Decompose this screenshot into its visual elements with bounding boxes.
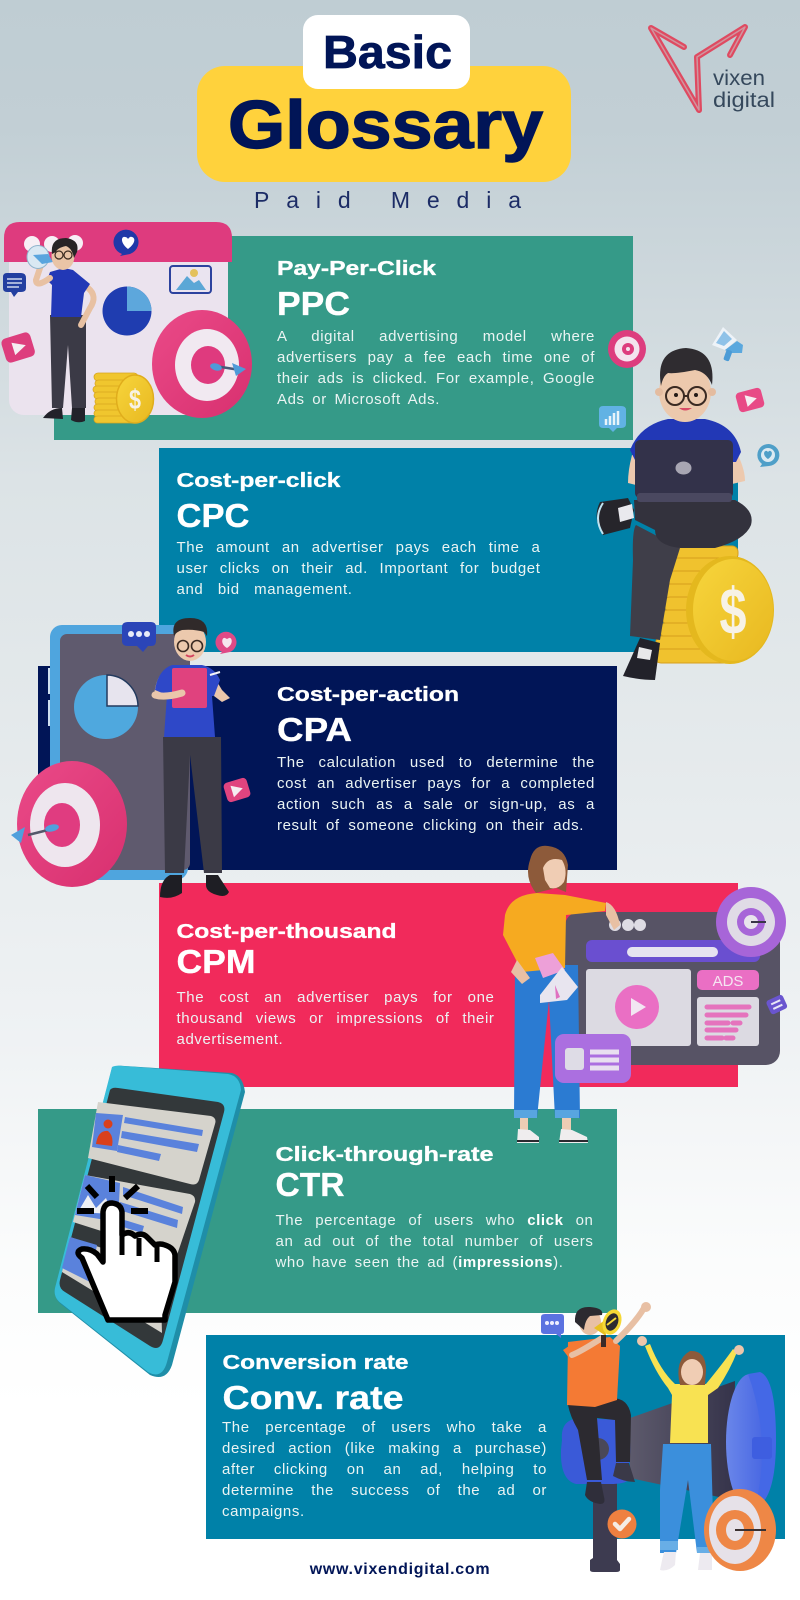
chart: pie — [102, 286, 152, 336]
icon: megaphone — [712, 327, 743, 362]
icon: coin stack — [93, 373, 154, 423]
panel: CPM — [159, 883, 738, 1087]
coin stack — [654, 546, 738, 663]
text: Conversion rate definition — [222, 1419, 547, 1520]
logo wordmark: vixen — [713, 67, 765, 90]
footer website: www.vixendigital.com — [310, 1561, 490, 1578]
text: Conversion rate definition: determine the success of the ad or — [222, 1482, 547, 1499]
illustration: CPM ad screen with woman — [503, 846, 788, 1143]
white title plate — [303, 15, 470, 89]
text: CPA definition — [277, 754, 595, 834]
icon: check badge — [608, 1510, 636, 1538]
text: CPM definition — [176, 989, 494, 1048]
man in orange shirt — [563, 1302, 651, 1504]
text: CPA definition: The calculation used to determine the — [277, 754, 595, 771]
panel: CPC: Cost-per-click — [176, 469, 341, 492]
icon: dots bubble — [122, 622, 156, 652]
icon: orange target — [704, 1489, 776, 1571]
text: CPM definition: The cost an advertiser pays for one — [176, 989, 494, 1006]
icon: target with dart — [11, 761, 127, 887]
man with clipboard — [154, 618, 230, 898]
chart: pie — [74, 675, 138, 739]
text: CPC definition — [176, 539, 540, 598]
panel: PPC: Pay-Per-Click — [277, 257, 437, 280]
text: CTR definition — [276, 1212, 594, 1271]
illustration: PPC window with man, target and coins — [0, 222, 252, 423]
panel: CTR — [38, 1109, 617, 1313]
text: Conversion rate definition: desired action (like making a purchase) — [222, 1440, 547, 1457]
phone screen — [60, 1088, 224, 1348]
text: CTR definition: The percentage of users who click on — [276, 1212, 594, 1229]
text: CPM definition: advertisement. — [176, 1031, 283, 1048]
illustration: CPA tablet with man and target — [11, 618, 251, 898]
woman with megaphone — [503, 846, 620, 1143]
panel: Conversion rate: Conversion rate — [222, 1351, 408, 1374]
text: PPC definition: Ads or Microsoft Ads. — [277, 391, 440, 408]
icon: play button — [735, 387, 765, 413]
panel: CTR: Click-through-rate — [276, 1143, 494, 1166]
text: CPA definition: action such as a sale or sign-up, as a — [277, 796, 595, 813]
logo wordmark — [713, 67, 775, 112]
man with megaphone — [27, 238, 94, 422]
icon: heart bubble — [215, 632, 236, 654]
icon: dollar coin: $ — [720, 574, 746, 648]
logo: vixen digital — [651, 27, 775, 112]
text: PPC definition: A digital advertising model where — [277, 328, 595, 345]
panel: PPC: PPC — [277, 285, 350, 322]
panel: CPC: CPC — [176, 497, 250, 534]
text: PPC definition: advertisers pay a fee each time one of — [277, 349, 595, 366]
text: CPC definition: user clicks on their ad. Important for budget — [176, 560, 540, 577]
illustration: Conversion rate megaphone with two people — [541, 1302, 776, 1572]
illustration: CPC man with laptop on coins — [597, 327, 779, 680]
text: Conversion rate definition: campaigns. — [222, 1503, 305, 1520]
ad screen — [565, 912, 780, 1065]
text: PPC definition: their ads is clicked. For example, Google — [277, 370, 595, 387]
panel: CPA: Cost-per-action — [277, 683, 459, 706]
title text — [228, 26, 544, 213]
seated man — [597, 348, 752, 680]
icon: small target — [608, 330, 646, 368]
icon: chart bubble — [599, 406, 626, 432]
title text: Paid Media — [254, 187, 521, 213]
logo wordmark: digital — [713, 89, 775, 112]
icon: play button — [0, 331, 36, 364]
icon: picture frame — [170, 266, 211, 293]
title block — [197, 15, 571, 213]
icon: purple target — [716, 887, 786, 957]
panel: CPM: CPM — [176, 943, 256, 980]
icon: purple bubble — [765, 994, 788, 1015]
title text: Glossary — [228, 87, 543, 163]
title text: Basic — [323, 26, 452, 78]
text: CPM definition: thousand views or impressions of their — [176, 1010, 494, 1027]
panel: CPA: CPA — [277, 711, 352, 748]
text: CPA definition: cost an advertiser pays for a completed — [277, 775, 595, 792]
icon: target with dart — [152, 310, 252, 418]
ad screen: ADS — [713, 973, 743, 990]
phone body — [55, 1066, 245, 1377]
panel: PPC — [54, 236, 633, 440]
woman in yellow sweater — [637, 1336, 744, 1570]
text: PPC definition — [277, 328, 595, 408]
text: CTR definition: who have seen the ad (impressions). — [276, 1254, 564, 1271]
panel: CTR: CTR — [276, 1166, 345, 1203]
text: CTR definition: an ad out of the total number of users — [276, 1233, 594, 1250]
icon: heart bubble — [757, 444, 779, 467]
panel: CPA — [38, 666, 617, 870]
panel: Conversion rate: Conv. rate — [222, 1379, 403, 1416]
icon: cursor hand — [77, 1176, 175, 1320]
icon: dollar coin — [686, 556, 774, 664]
icon: chat bubble — [3, 273, 26, 297]
text: CPC definition: and bid management. — [176, 581, 352, 598]
illustration: CTR phone with cursor hand — [55, 1066, 245, 1377]
icon: heart bubble — [114, 230, 138, 256]
text: Conversion rate definition: The percentage of users who take a — [222, 1419, 547, 1436]
icon: play button — [223, 777, 251, 803]
text: CPC definition: The amount an advertiser pays each time a — [176, 539, 540, 556]
text: Conversion rate definition: after clicking on an ad, helping to — [222, 1461, 547, 1478]
panel: Conversion rate — [206, 1335, 784, 1539]
tablet — [50, 625, 190, 880]
yellow title plate — [197, 66, 571, 182]
icon: V arrow mark — [651, 27, 745, 110]
giant megaphone — [561, 1372, 776, 1572]
icon: dots bubble — [541, 1314, 564, 1338]
text: CPA definition: result of someone clicking on their ads. — [277, 817, 584, 834]
panel: CPM: Cost-per-thousand — [176, 920, 396, 943]
icon: coin stack: $ — [129, 384, 141, 415]
icon: purple profile card — [555, 1034, 631, 1083]
panel: CPC — [159, 448, 738, 652]
